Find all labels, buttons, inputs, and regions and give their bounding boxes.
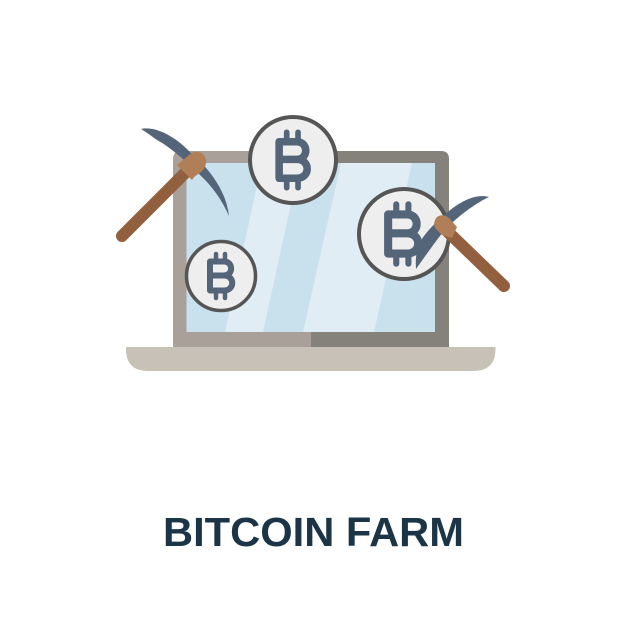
- coin: right bitcoin: [359, 189, 449, 279]
- left pick handle: [122, 170, 188, 236]
- bitcoin symbol right: [388, 204, 418, 264]
- screen glare bands: [225, 163, 412, 332]
- icon: pickaxe right: [416, 196, 504, 286]
- laptop screen: [186, 163, 435, 332]
- laptop base: [126, 347, 496, 371]
- right pick head: [434, 215, 457, 238]
- laptop lid right half: [311, 151, 449, 347]
- bitcoin symbol top: [279, 132, 307, 188]
- laptop lid left half: [173, 151, 311, 347]
- icon: pickaxe left: [122, 128, 229, 236]
- left pick blade: [141, 128, 229, 216]
- icon: laptop: [126, 151, 496, 371]
- left pick head: [177, 152, 206, 180]
- coin: top bitcoin: [250, 117, 336, 203]
- bitcoin symbol left: [210, 254, 232, 298]
- title: BITCOIN FARM: [163, 509, 464, 555]
- right pick handle: [448, 232, 504, 286]
- right pick blade: [416, 196, 489, 269]
- coin: left bitcoin: [186, 242, 256, 310]
